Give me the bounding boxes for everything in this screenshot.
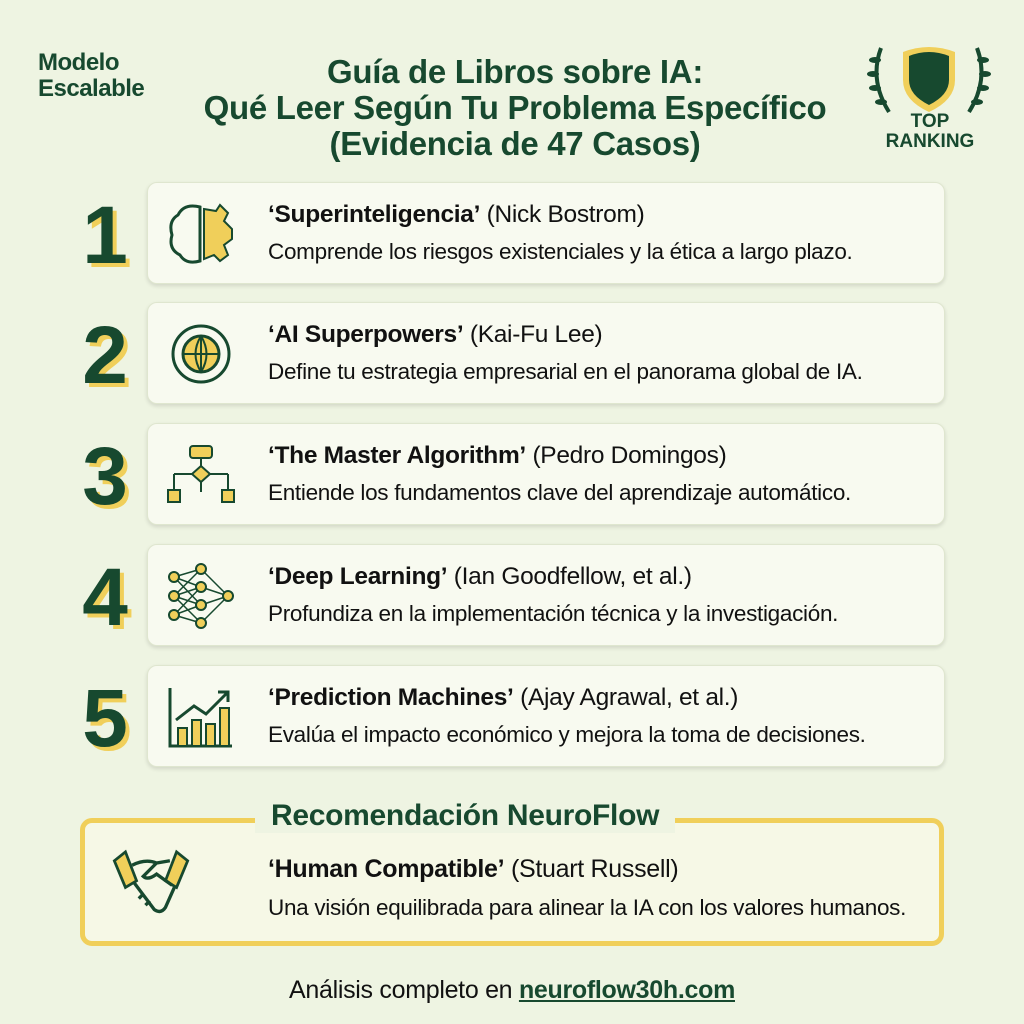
card 5: [147, 665, 945, 767]
badge: top ranking: [867, 47, 991, 152]
icon: handshake: [112, 850, 190, 914]
icon: growth chart: [168, 688, 232, 748]
card 4: [147, 544, 945, 646]
card 3: [147, 423, 945, 525]
card 4: ‘Deep Learning’ (Ian Goodfellow, et al.): [268, 563, 692, 590]
number 1: 1: [82, 190, 128, 281]
card 2: [147, 302, 945, 404]
card 5: Evalúa el impacto económico y mejora la toma de decisiones.: [268, 722, 866, 747]
number 2: 2: [82, 310, 128, 401]
number 5: 5: [82, 673, 128, 764]
card 1: [147, 182, 945, 284]
card 5: ‘Prediction Machines’ (Ajay Agrawal, et al.): [268, 684, 738, 711]
number 3: 3: [82, 431, 128, 522]
card 3: Entiende los fundamentos clave del aprendizaje automático.: [268, 480, 851, 505]
title: (Evidencia de 47 Casos): [330, 125, 700, 162]
number 4: 4: [82, 552, 128, 643]
icon: flowchart: [167, 445, 235, 503]
card 2: Define tu estrategia empresarial en el panorama global de IA.: [268, 359, 863, 384]
card 1: ‘Superinteligencia’ (Nick Bostrom): [268, 201, 644, 228]
card 1: Comprende los riesgos existenciales y la ética a largo plazo.: [268, 239, 853, 264]
footer: Análisis completo en neuroflow30h.com: [289, 976, 735, 1004]
panel: recomendación: ‘Human Compatible’ (Stuart Russell): [268, 855, 678, 883]
icon: brain gear: [169, 203, 233, 264]
badge: top ranking: TOP: [911, 111, 949, 132]
panel: recomendación: [80, 818, 944, 946]
badge: top ranking: RANKING: [886, 131, 974, 152]
title: Guía de Libros sobre IA:: [327, 53, 703, 90]
label: Modelo Escalable: [38, 49, 144, 102]
heading: Recomendación NeuroFlow: Recomendación NeuroFlow: [271, 799, 659, 832]
title: [204, 53, 826, 162]
label: Modelo Escalable: Modelo: [38, 49, 119, 76]
label: Modelo Escalable: Escalable: [38, 75, 144, 102]
panel: recomendación: Una visión equilibrada para alinear la IA con los valores humanos.: [268, 895, 906, 920]
card 4: Profundiza en la implementación técnica y la investigación.: [268, 601, 838, 626]
card 2: ‘AI Superpowers’ (Kai-Fu Lee): [268, 321, 602, 348]
title: Qué Leer Según Tu Problema Específico: [204, 89, 826, 126]
icon: neural net: [168, 563, 234, 629]
icon: globe: [172, 324, 230, 384]
card 3: ‘The Master Algorithm’ (Pedro Domingos): [268, 442, 726, 469]
